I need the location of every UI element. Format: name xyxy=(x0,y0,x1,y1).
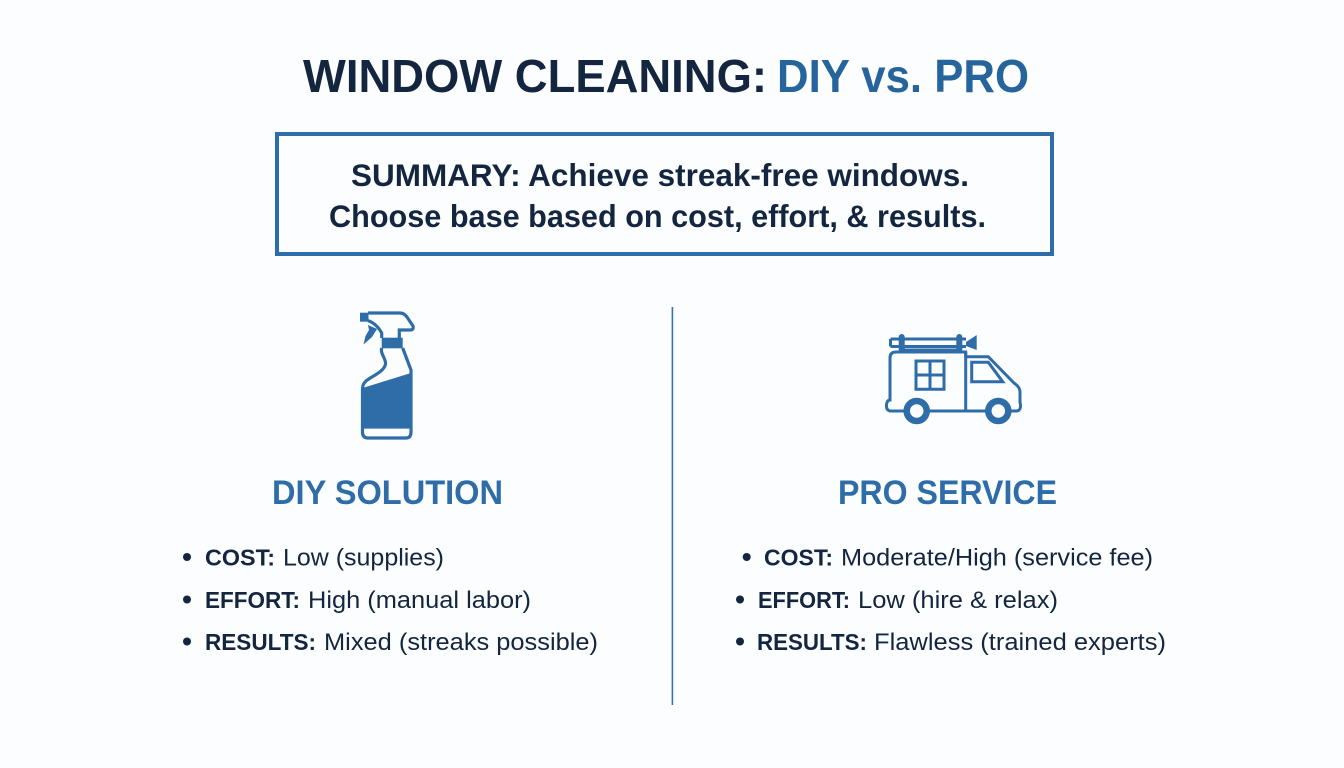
item: DIY effort: High (manual labor) xyxy=(308,587,531,614)
item: pro results: Flawless (trained experts) xyxy=(874,629,1166,656)
summary text xyxy=(329,157,986,234)
item: pro effort: EFFORT: xyxy=(758,587,850,613)
item: DIY results: RESULTS: xyxy=(205,629,316,655)
title: WINDOW CLEANING: xyxy=(303,50,767,102)
list: pro details xyxy=(736,544,1166,656)
icon: service van xyxy=(886,335,1020,421)
item: DIY results xyxy=(183,629,598,656)
item: DIY effort xyxy=(183,587,531,614)
summary box xyxy=(277,134,1052,254)
list: DIY details xyxy=(183,544,598,656)
summary text: SUMMARY: Achieve streak-free windows. xyxy=(351,157,969,193)
item: pro effort: Low (hire & relax) xyxy=(858,587,1058,614)
item: pro results xyxy=(736,629,1166,656)
heading: pro service: PRO SERVICE xyxy=(838,474,1057,512)
item: pro cost: COST: xyxy=(764,544,833,570)
item: DIY cost: COST: xyxy=(205,544,275,570)
summary text: Choose base based on cost, effort, & results. xyxy=(329,198,986,234)
item: pro results: RESULTS: xyxy=(757,629,867,655)
item: DIY effort: EFFORT: xyxy=(205,587,300,613)
title xyxy=(303,50,1029,102)
title: DIY vs. PRO xyxy=(777,50,1029,102)
item: DIY cost xyxy=(183,544,444,572)
heading: DIY solution: DIY SOLUTION xyxy=(272,474,503,512)
item: DIY cost: Low (supplies) xyxy=(283,544,444,572)
item: DIY results: Mixed (streaks possible) xyxy=(324,629,598,656)
item: pro cost: Moderate/High (service fee) xyxy=(841,544,1153,572)
item: pro effort xyxy=(736,587,1058,614)
icon: spray bottle xyxy=(360,313,413,438)
